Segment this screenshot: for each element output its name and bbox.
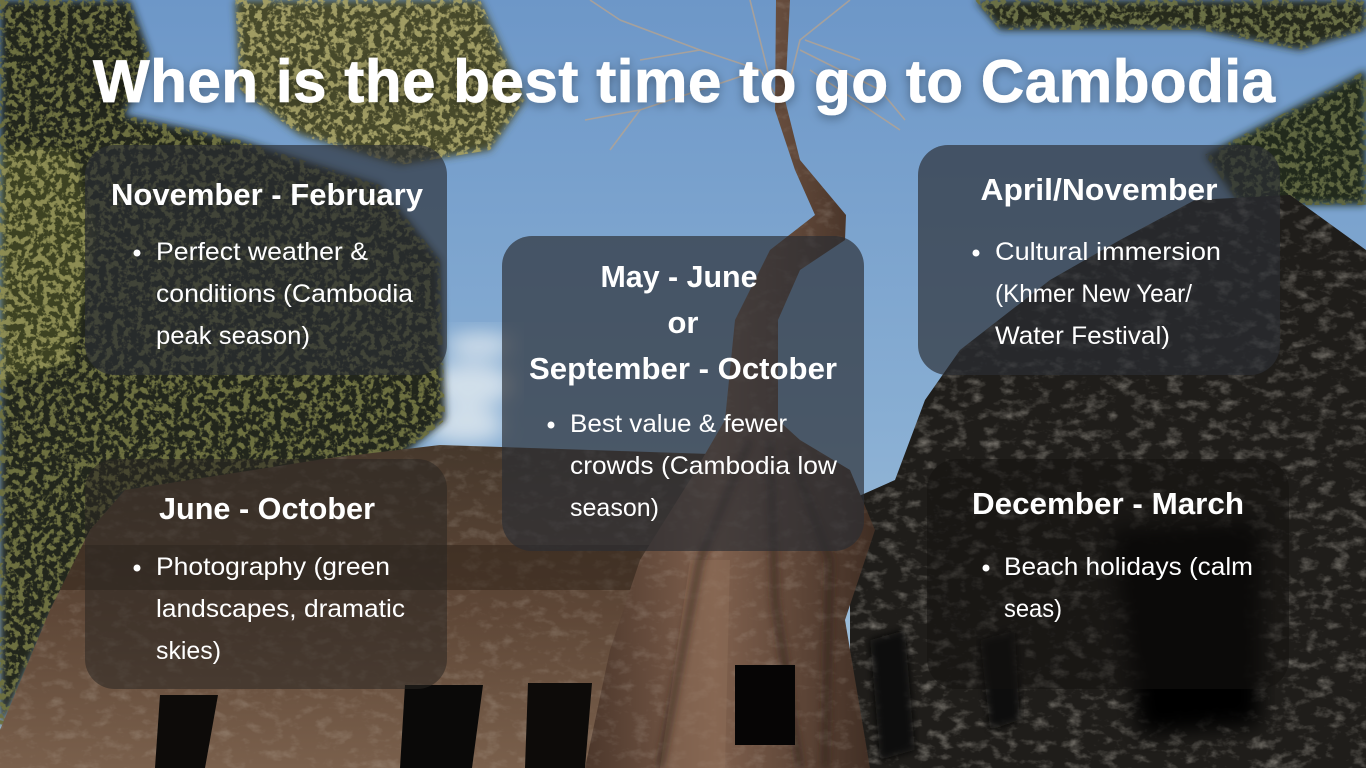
heading: May - June or September - October: May - June: [600, 259, 758, 294]
bullet list: perfect weather: Perfect weather &: [156, 238, 368, 266]
tree trunk and roots: [580, 0, 880, 768]
bullet list: perfect weather: conditions (Cambodia: [156, 280, 413, 308]
panel: May - June or September - October: [502, 236, 864, 551]
bullet list: beach holidays: Beach holidays (calm: [1004, 553, 1253, 581]
bullet list: photography: [134, 553, 405, 665]
bullet list: best value: Best value & fewer: [570, 410, 787, 438]
bullet list: best value: crowds (Cambodia low: [570, 452, 838, 480]
bullet list: cultural immersion: (Khmer New Year/: [995, 280, 1192, 308]
bullet list: cultural immersion: [972, 238, 1221, 350]
bullet list: photography: skies): [156, 637, 221, 665]
bullet list: perfect weather: [134, 238, 413, 350]
heading: December - March: December - March: [972, 486, 1244, 521]
heading: May - June or September - October: [529, 259, 837, 386]
bullet list: best value: season): [570, 494, 659, 522]
tree branches: [585, 0, 905, 150]
bullet list: photography: landscapes, dramatic: [156, 595, 405, 623]
heading: April/November: April/November: [980, 172, 1218, 207]
panel: April/November: [918, 145, 1280, 375]
title: When is the best time to go to Cambodia: [93, 48, 1276, 115]
left temple ruin: [0, 440, 740, 768]
bullet list: beach holidays: seas): [1004, 595, 1062, 623]
bullet list: beach holidays: [982, 553, 1253, 623]
panel: December - March: [927, 459, 1289, 689]
heading: May - June or September - October: or: [668, 305, 698, 340]
bullet list: cultural immersion: Water Festival): [995, 322, 1170, 350]
heading: May - June or September - October: September - October: [529, 351, 837, 386]
right temple ruin: [850, 190, 1366, 768]
heading: November - February: November - February: [111, 177, 424, 212]
bullet list: cultural immersion: Cultural immersion: [995, 238, 1221, 266]
bullet list: photography: Photography (green: [156, 553, 390, 581]
bullet list: perfect weather: peak season): [156, 322, 310, 350]
bullet list: best value: [548, 410, 838, 522]
panel: June - October: [85, 459, 447, 689]
heading: June - October: June - October: [159, 491, 375, 526]
panel: November - February: [85, 145, 447, 375]
